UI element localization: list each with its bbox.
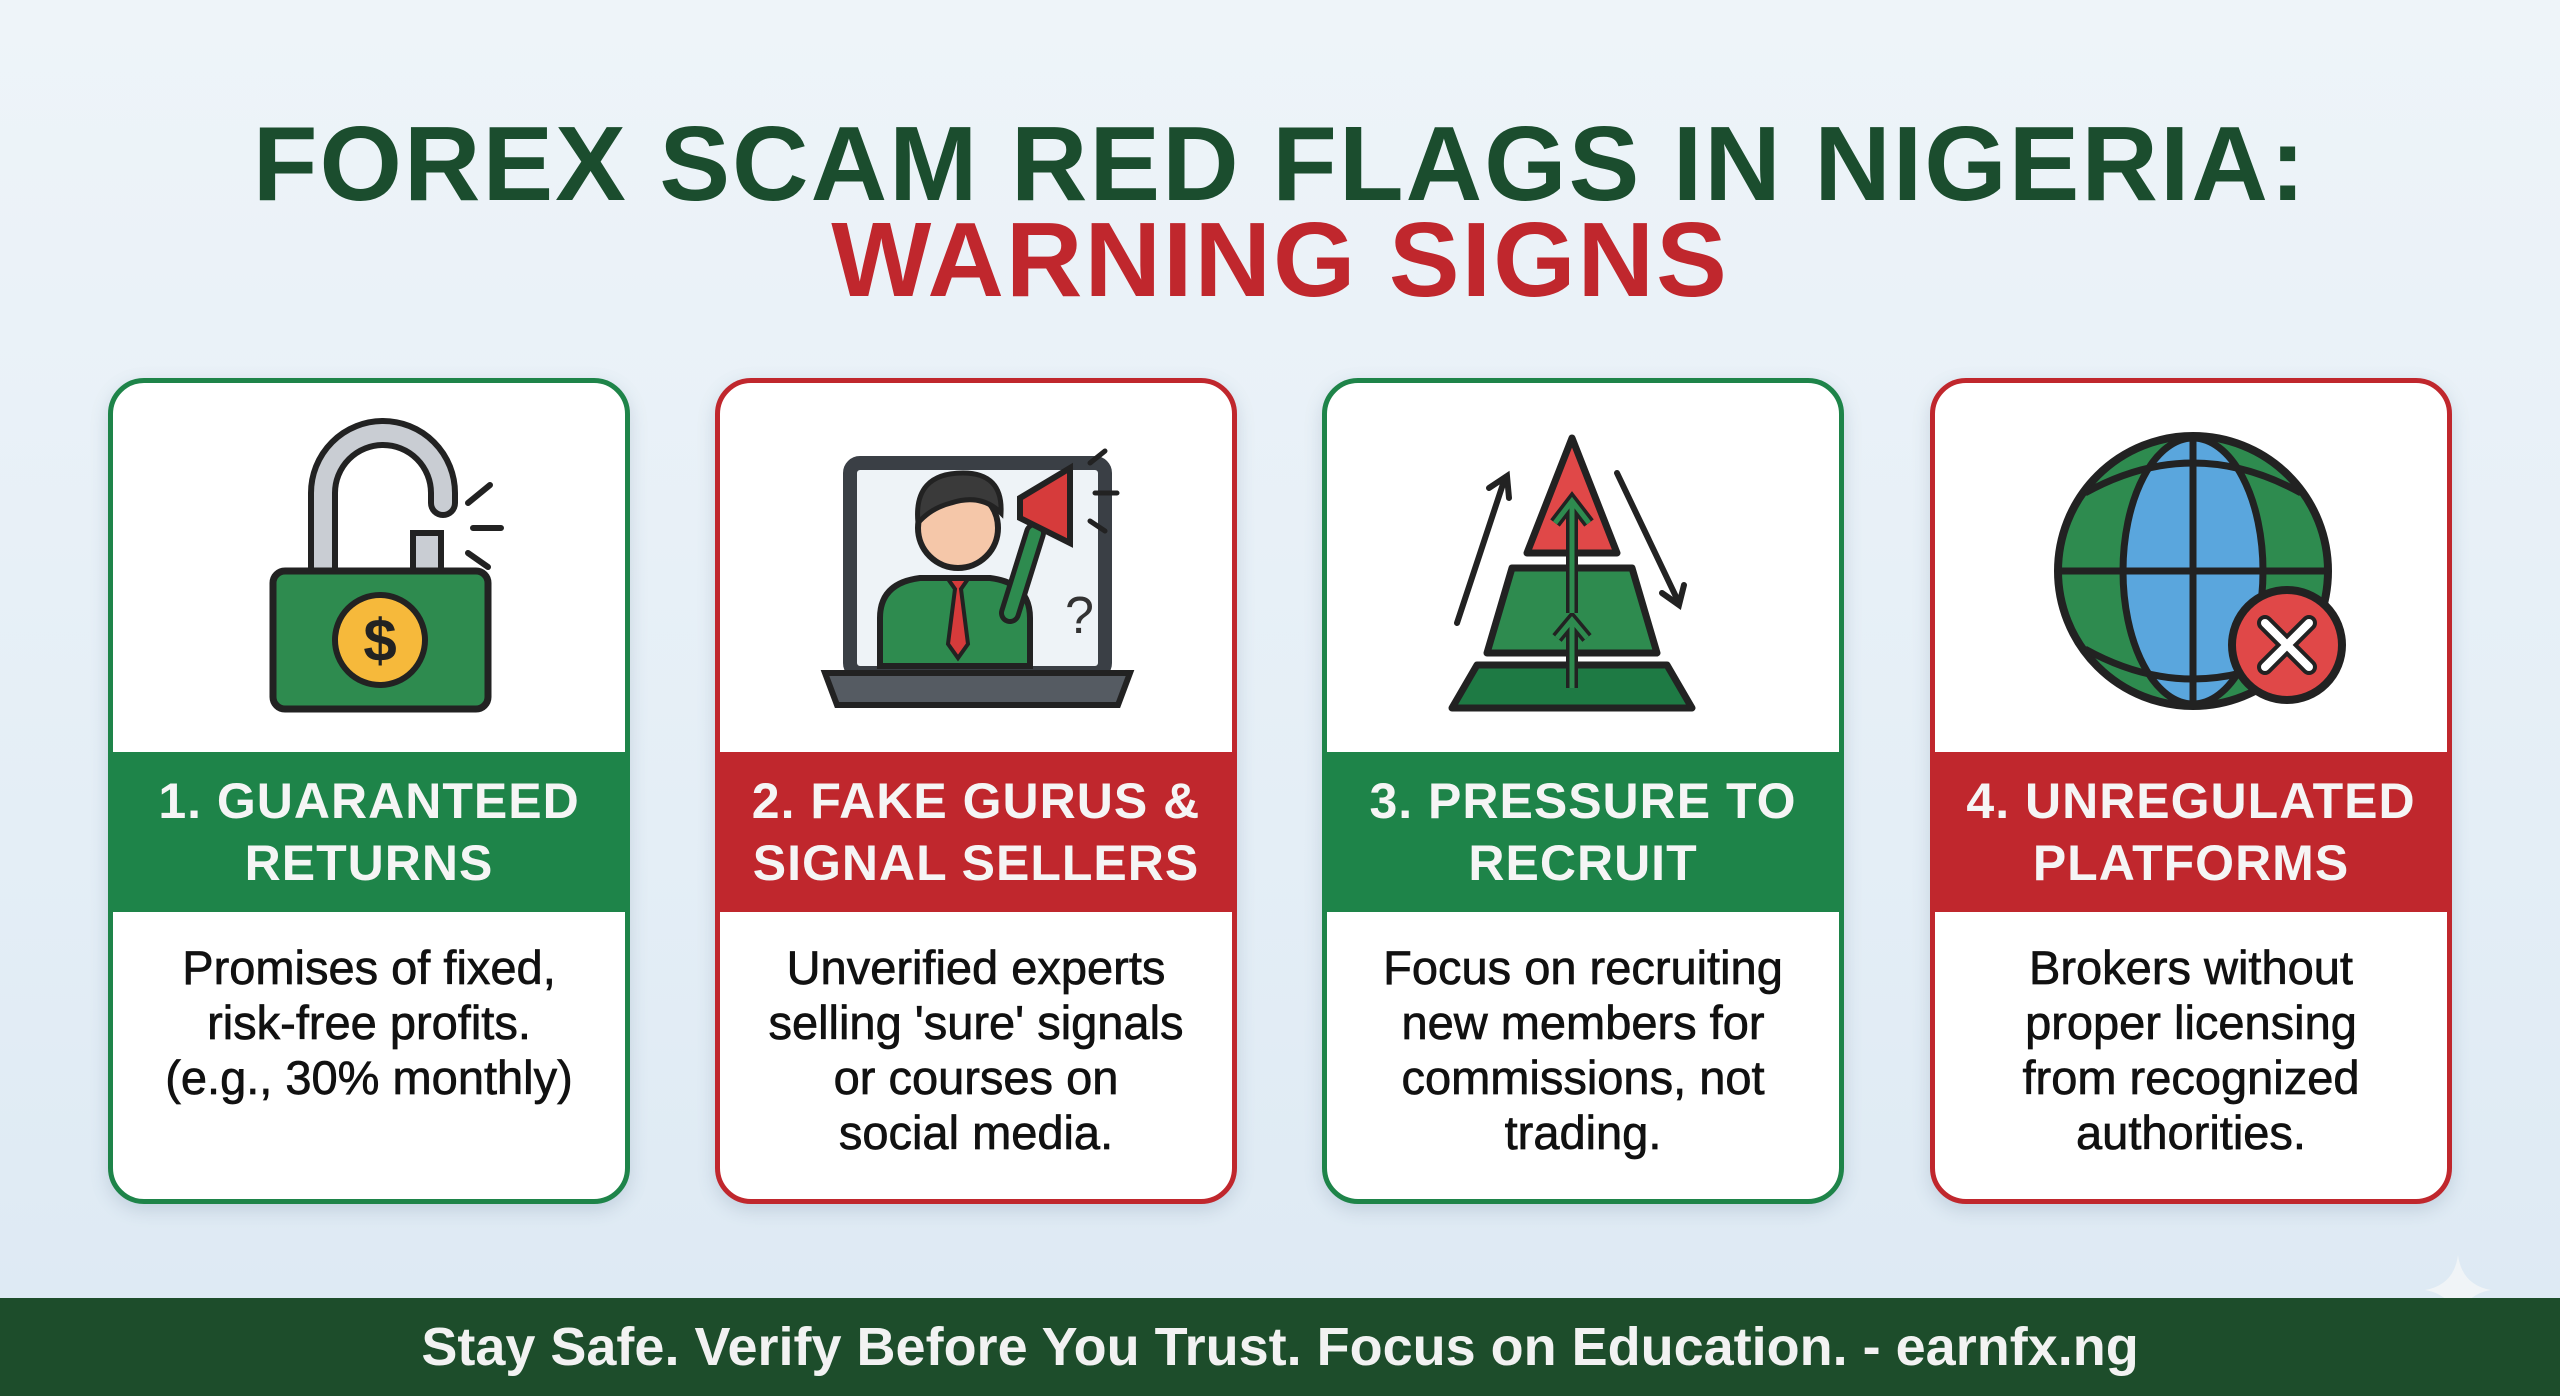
panel: pressure to recruit [1322, 378, 1844, 1204]
heading band: 1. GUARANTEED [158, 773, 580, 829]
panel: fake gurus [715, 378, 1237, 1204]
description: risk-free profits. [207, 996, 531, 1049]
description [1383, 941, 1783, 1160]
description: or courses on [834, 1051, 1118, 1104]
footer banner: Stay Safe. Verify Before You Trust. Focus on Education. - earnfx.ng [421, 1317, 2139, 1377]
heading band: 4. UNREGULATED [1966, 773, 2416, 829]
icon: guru on laptop with megaphone [820, 448, 1134, 708]
panel: guaranteed returns [108, 378, 630, 1204]
heading band [1935, 752, 2447, 912]
description: new members for [1401, 996, 1765, 1049]
description [165, 941, 573, 1104]
description [2022, 941, 2360, 1159]
heading band [720, 752, 1232, 912]
description: trading. [1505, 1106, 1661, 1159]
heading band: 3. PRESSURE TO [1369, 773, 1797, 829]
heading band: PLATFORMS [2033, 835, 2349, 891]
description: Brokers without [2029, 941, 2353, 994]
title line 2: WARNING SIGNS [831, 201, 1729, 319]
description [768, 941, 1184, 1159]
panel: unregulated platforms [1930, 378, 2452, 1204]
icon: sparkle [2426, 1256, 2490, 1298]
description: selling 'sure' signals [768, 996, 1184, 1049]
heading band [1327, 752, 1839, 912]
footer banner [0, 1298, 2560, 1396]
heading band [113, 752, 625, 912]
heading band: RETURNS [245, 835, 493, 891]
icon: pyramid scheme [1448, 434, 1696, 712]
description: commissions, not [1401, 1051, 1765, 1104]
description: proper licensing [2025, 996, 2357, 1049]
heading band: SIGNAL SELLERS [753, 835, 1199, 891]
title line 1: FOREX SCAM RED FLAGS IN NIGERIA: [253, 105, 2307, 223]
description: social media. [839, 1106, 1113, 1159]
heading band: RECRUIT [1468, 835, 1698, 891]
description: (e.g., 30% monthly) [165, 1051, 573, 1104]
description: Promises of fixed, [182, 941, 556, 994]
description: from recognized [2022, 1051, 2360, 1104]
icon: globe with red x [2054, 432, 2346, 710]
icon: guru on laptop with megaphone: ? [1065, 587, 1094, 645]
description: Unverified experts [787, 941, 1165, 994]
icon: lock with dollar coin: $ [363, 607, 397, 674]
icon: lock with dollar coin [270, 418, 504, 712]
description: Focus on recruiting [1383, 941, 1783, 994]
heading band: 2. FAKE GURUS & [752, 773, 1200, 829]
description: authorities. [2076, 1106, 2306, 1159]
